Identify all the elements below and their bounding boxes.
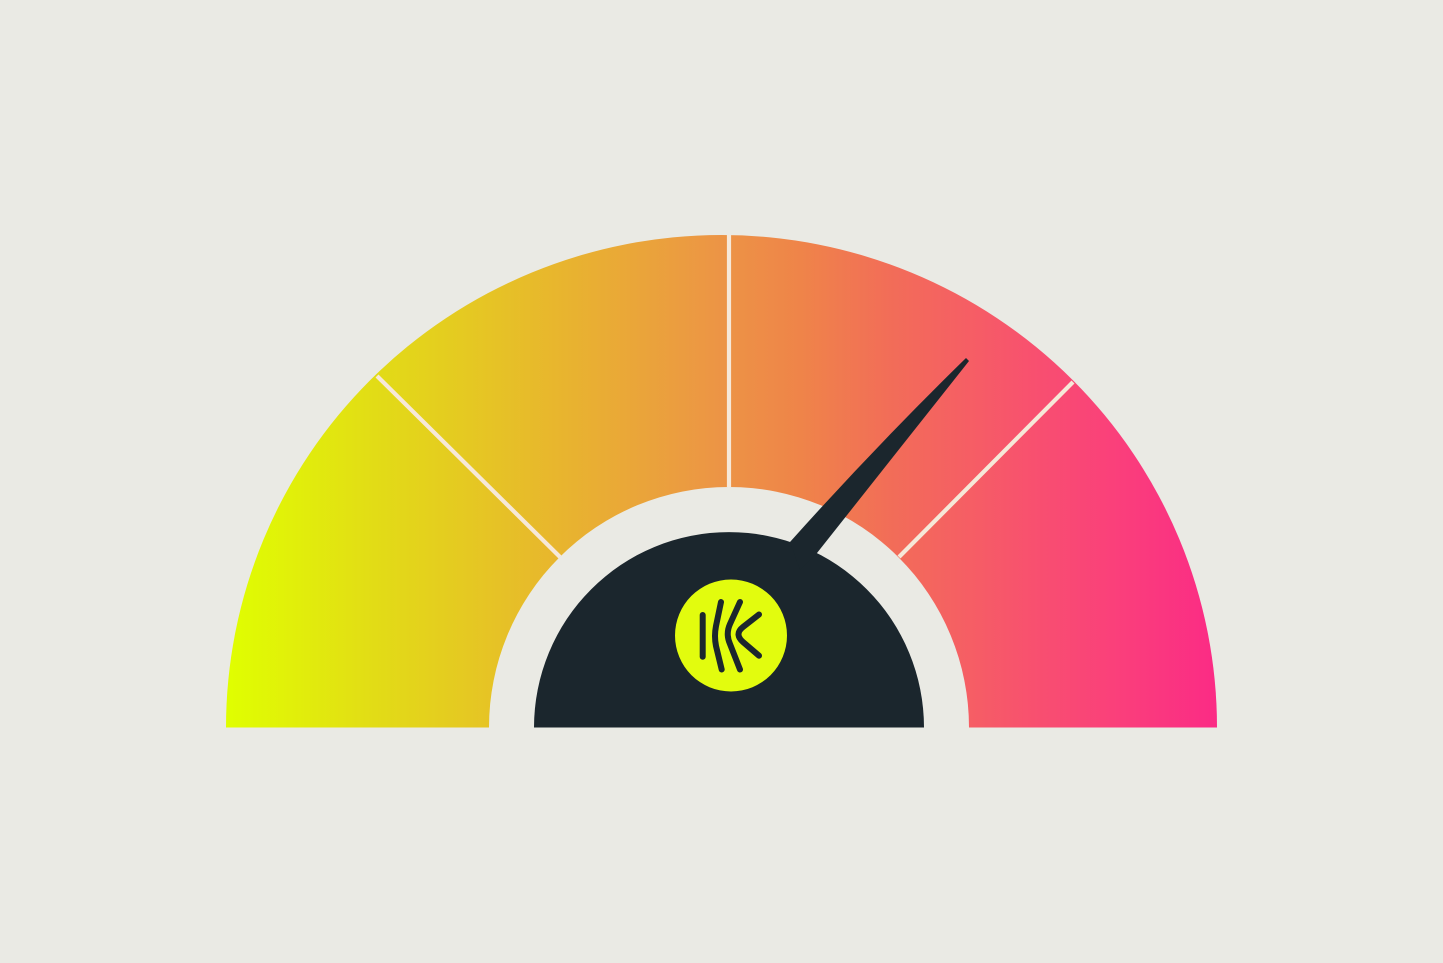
segment dividers bbox=[377, 235, 1073, 557]
logo badge bbox=[675, 580, 787, 692]
icon: logo mark bbox=[703, 602, 759, 670]
gauge arc with gradient bbox=[226, 235, 1217, 728]
dial hub bbox=[534, 532, 924, 728]
inner ring bbox=[489, 487, 969, 728]
needle bbox=[790, 358, 969, 570]
